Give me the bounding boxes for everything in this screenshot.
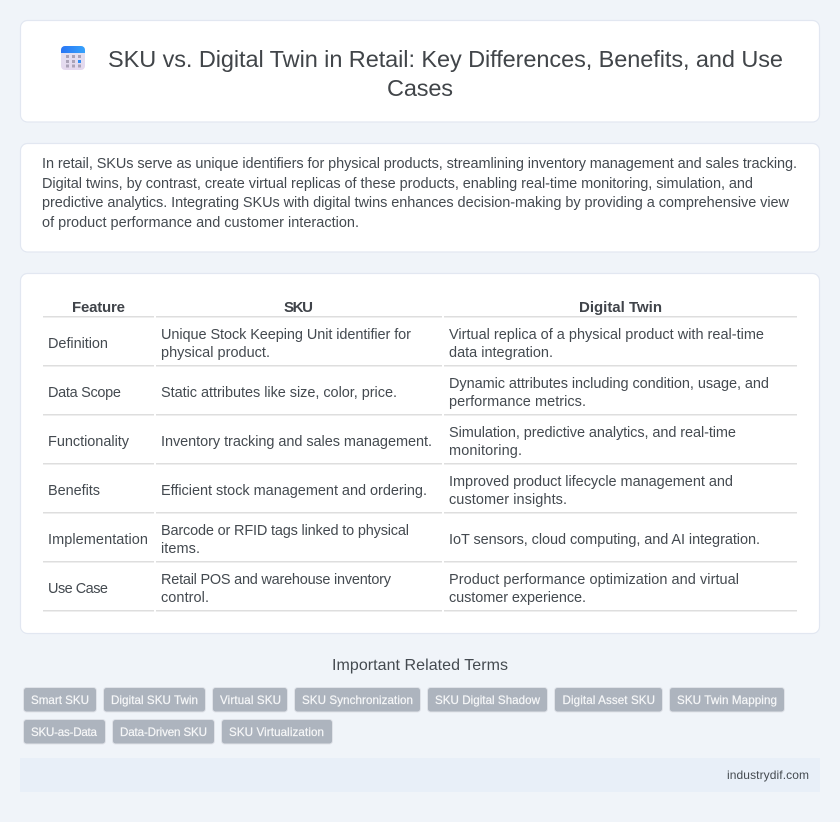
row: use case: Retail POS and warehouse inventory: [161, 572, 392, 588]
tag: Digital Asset SKU: Digital Asset SKU: [562, 694, 655, 707]
row: data scope: Data Scope: [48, 385, 121, 401]
tag: Data-Driven SKU: Data-Driven SKU: [120, 726, 207, 739]
row: use case: [48, 572, 739, 606]
tag: Virtual SKU: [212, 688, 288, 712]
row: definition: physical product.: [161, 345, 270, 361]
row: use case: control.: [161, 590, 209, 606]
row: functionality: Simulation, predictive analytics, and real-time: [449, 425, 736, 441]
row: benefits: customer insights.: [449, 492, 567, 508]
text block: intro paragraph: Digital twins, by contrast, create virtual replicas of these products, enabling real-time monitoring, simulation, and: [42, 176, 753, 192]
text block: intro paragraph: of product performance and customer interaction.: [42, 215, 359, 231]
tag: Data-Driven SKU: [112, 720, 214, 744]
row: functionality: Functionality: [48, 434, 130, 450]
tag: Smart SKU: Smart SKU: [31, 694, 89, 707]
table header row: SKU: [284, 299, 313, 316]
row: benefits: Benefits: [48, 483, 100, 499]
row: data scope: [48, 376, 769, 410]
tag: SKU Virtualization: [222, 720, 332, 744]
tag: Digital Asset SKU: [554, 688, 662, 712]
footer: [20, 758, 820, 792]
row: use case: Use Case: [48, 581, 108, 597]
tag: Digital SKU Twin: [104, 688, 206, 712]
row: data scope: Dynamic attributes including condition, usage, and: [449, 376, 769, 392]
table header row: Digital Twin: [579, 299, 662, 316]
row: implementation: items.: [161, 541, 200, 557]
row: implementation: Implementation: [48, 532, 148, 548]
footer source text: industrydif.com: [727, 768, 809, 782]
row: use case: Product performance optimization and virtual: [449, 572, 739, 588]
title: Cases: [387, 75, 453, 101]
row: benefits: Efficient stock management and ordering.: [161, 483, 427, 499]
row: functionality: [48, 425, 736, 459]
row: implementation: IoT sensors, cloud computing, and AI integration.: [449, 532, 760, 548]
row: data scope: Static attributes like size, color, price.: [161, 385, 397, 401]
table header row: [72, 299, 662, 316]
text block: intro paragraph: [42, 156, 797, 231]
row: definition: Definition: [48, 336, 108, 352]
row: definition: [48, 327, 764, 361]
heading: related terms: Important Related Terms: [332, 657, 508, 674]
tag: SKU-as-Data: SKU-as-Data: [31, 726, 98, 739]
row: data scope: performance metrics.: [449, 394, 586, 410]
row: use case: customer experience.: [449, 590, 586, 606]
tag: Virtual SKU: Virtual SKU: [220, 694, 281, 707]
row: definition: data integration.: [449, 345, 553, 361]
tag: SKU-as-Data: [24, 720, 106, 744]
tags: related terms: [24, 688, 784, 744]
row: benefits: Improved product lifecycle management and: [449, 474, 733, 490]
tag: Digital SKU Twin: Digital SKU Twin: [111, 694, 198, 707]
row: functionality: Inventory tracking and sales management.: [161, 434, 432, 450]
tag: SKU Digital Shadow: SKU Digital Shadow: [435, 694, 541, 707]
tag: SKU Synchronization: [294, 688, 420, 712]
title: [108, 46, 783, 101]
row: implementation: Barcode or RFID tags linked to physical: [161, 523, 409, 539]
tag: SKU Twin Mapping: [670, 688, 784, 712]
title: SKU vs. Digital Twin in Retail: Key Differences, Benefits, and Use: [108, 46, 783, 72]
row: definition: Virtual replica of a physical product with real-time: [449, 327, 764, 343]
tag: SKU Virtualization: SKU Virtualization: [229, 726, 324, 739]
table header row: Feature: [72, 299, 125, 316]
panel: introduction: [20, 144, 820, 252]
icon: calendar: [61, 46, 85, 70]
text block: intro paragraph: In retail, SKUs serve as unique identifiers for physical products, streamlining inventory management and sales tracking.: [42, 156, 797, 172]
tag: Smart SKU: [24, 688, 96, 712]
panel: header: [20, 20, 820, 122]
text block: intro paragraph: predictive analytics. Integrating SKUs with digital twins enhances decision-making by providing a comprehensive view: [42, 195, 790, 211]
row: benefits: [48, 474, 733, 508]
row: implementation: [48, 523, 760, 557]
row: functionality: monitoring.: [449, 443, 522, 459]
tag: SKU Digital Shadow: [428, 688, 548, 712]
tag: SKU Twin Mapping: SKU Twin Mapping: [677, 694, 777, 707]
tag: SKU Synchronization: SKU Synchronization: [302, 694, 413, 707]
panel: comparison table: [20, 274, 820, 634]
row: definition: Unique Stock Keeping Unit identifier for: [161, 327, 411, 343]
